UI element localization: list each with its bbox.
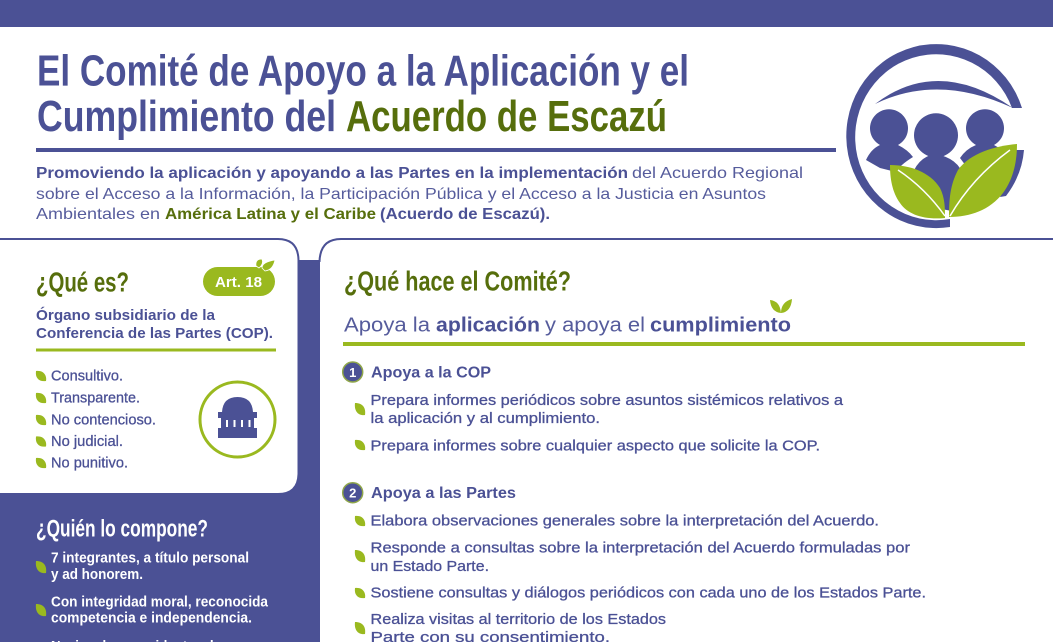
intro paragraph: América Latina y el Caribe <box>165 206 376 223</box>
subtitle: Apoya la <box>344 314 431 336</box>
definition: Conferencia de las Partes (COP). <box>36 325 273 342</box>
section 1: apoya a la COP <box>343 362 844 454</box>
intro paragraph: (Acuerdo de Escazú). <box>380 206 550 223</box>
list: characteristics: Transparente. <box>51 390 140 406</box>
section 2: apoya a las partes: Sostiene consultas y diálogos periódicos con cada uno de los Estados Parte. <box>370 584 926 602</box>
badge: art. 18 <box>203 259 275 296</box>
list: characteristics: No punitivo. <box>51 454 128 472</box>
section 1: apoya a la COP: 1 <box>349 365 356 380</box>
intro paragraph: del Acuerdo Regional <box>632 165 803 182</box>
list: composition: 7 integrantes, a título personal <box>51 550 249 566</box>
icon: leaves <box>770 299 792 313</box>
list: composition: Con integridad moral, reconocida <box>51 594 269 610</box>
green rule <box>36 348 276 352</box>
heading: quien lo compone: ¿Quién lo compone? <box>36 516 208 542</box>
heading: que hace el comite: ¿Qué hace el Comité? <box>344 266 571 296</box>
subtitle: aplicación <box>436 314 540 336</box>
section 1: apoya a la COP: Apoya a la COP <box>371 364 491 382</box>
title: El Comité de Apoyo a la Aplicación y el <box>37 46 689 96</box>
heading: que es: ¿Qué es? <box>36 266 129 298</box>
intro paragraph: Promoviendo la aplicación y apoyando a las Partes en la implementación <box>36 165 628 182</box>
list: composition: y ad honorem. <box>51 567 143 583</box>
intro paragraph: Ambientales en <box>36 206 160 223</box>
panel: left column <box>0 239 320 642</box>
list: characteristics: No contencioso. <box>51 412 156 428</box>
section 2: apoya a las partes <box>343 483 926 642</box>
logo: people and leaves <box>846 44 1024 228</box>
section 2: apoya a las partes: Realiza visitas al territorio de los Estados <box>370 611 666 628</box>
section 1: apoya a la COP: Prepara informes periódicos sobre asuntos sistémicos relativos a <box>370 392 844 409</box>
panel: right column <box>320 239 1053 642</box>
icon: institution building <box>200 382 275 457</box>
green rule <box>343 342 1025 346</box>
section 2: apoya a las partes: Elabora observaciones generales sobre la interpretación del Acuerdo. <box>370 512 879 530</box>
section 1: apoya a la COP: la aplicación y al cumplimiento. <box>370 410 600 427</box>
list: characteristics: Consultivo. <box>51 368 123 384</box>
definition: Órgano subsidiario de la <box>36 306 216 324</box>
definition <box>36 306 273 342</box>
list: composition: competencia e independencia. <box>51 610 252 626</box>
subtitle <box>344 314 791 336</box>
subtitle: cumplimiento <box>650 314 791 336</box>
badge: art. 18: Art. 18 <box>215 274 262 291</box>
section 2: apoya a las partes: Responde a consultas sobre la interpretación del Acuerdo formuladas por <box>370 540 910 556</box>
list: characteristics: No judicial. <box>51 433 123 450</box>
section 1: apoya a la COP: Prepara informes sobre cualquier aspecto que solicite la COP. <box>370 438 820 454</box>
title rule <box>36 148 836 152</box>
title: Acuerdo de Escazú <box>346 92 667 141</box>
section 2: apoya a las partes: Apoya a las Partes <box>371 485 516 502</box>
title <box>37 46 689 141</box>
top banner <box>0 0 1053 27</box>
intro paragraph: sobre el Acceso a la Información, la Participación Pública y el Acceso a la Justicia en Asuntos <box>36 186 766 203</box>
list: characteristics <box>36 368 156 472</box>
title: Cumplimiento del <box>37 92 336 141</box>
intro paragraph <box>36 165 803 223</box>
section 2: apoya a las partes: un Estado Parte. <box>370 558 489 575</box>
subtitle: y apoya el <box>545 314 645 336</box>
section 2: apoya a las partes: 2 <box>349 486 356 501</box>
list: composition <box>36 550 269 642</box>
